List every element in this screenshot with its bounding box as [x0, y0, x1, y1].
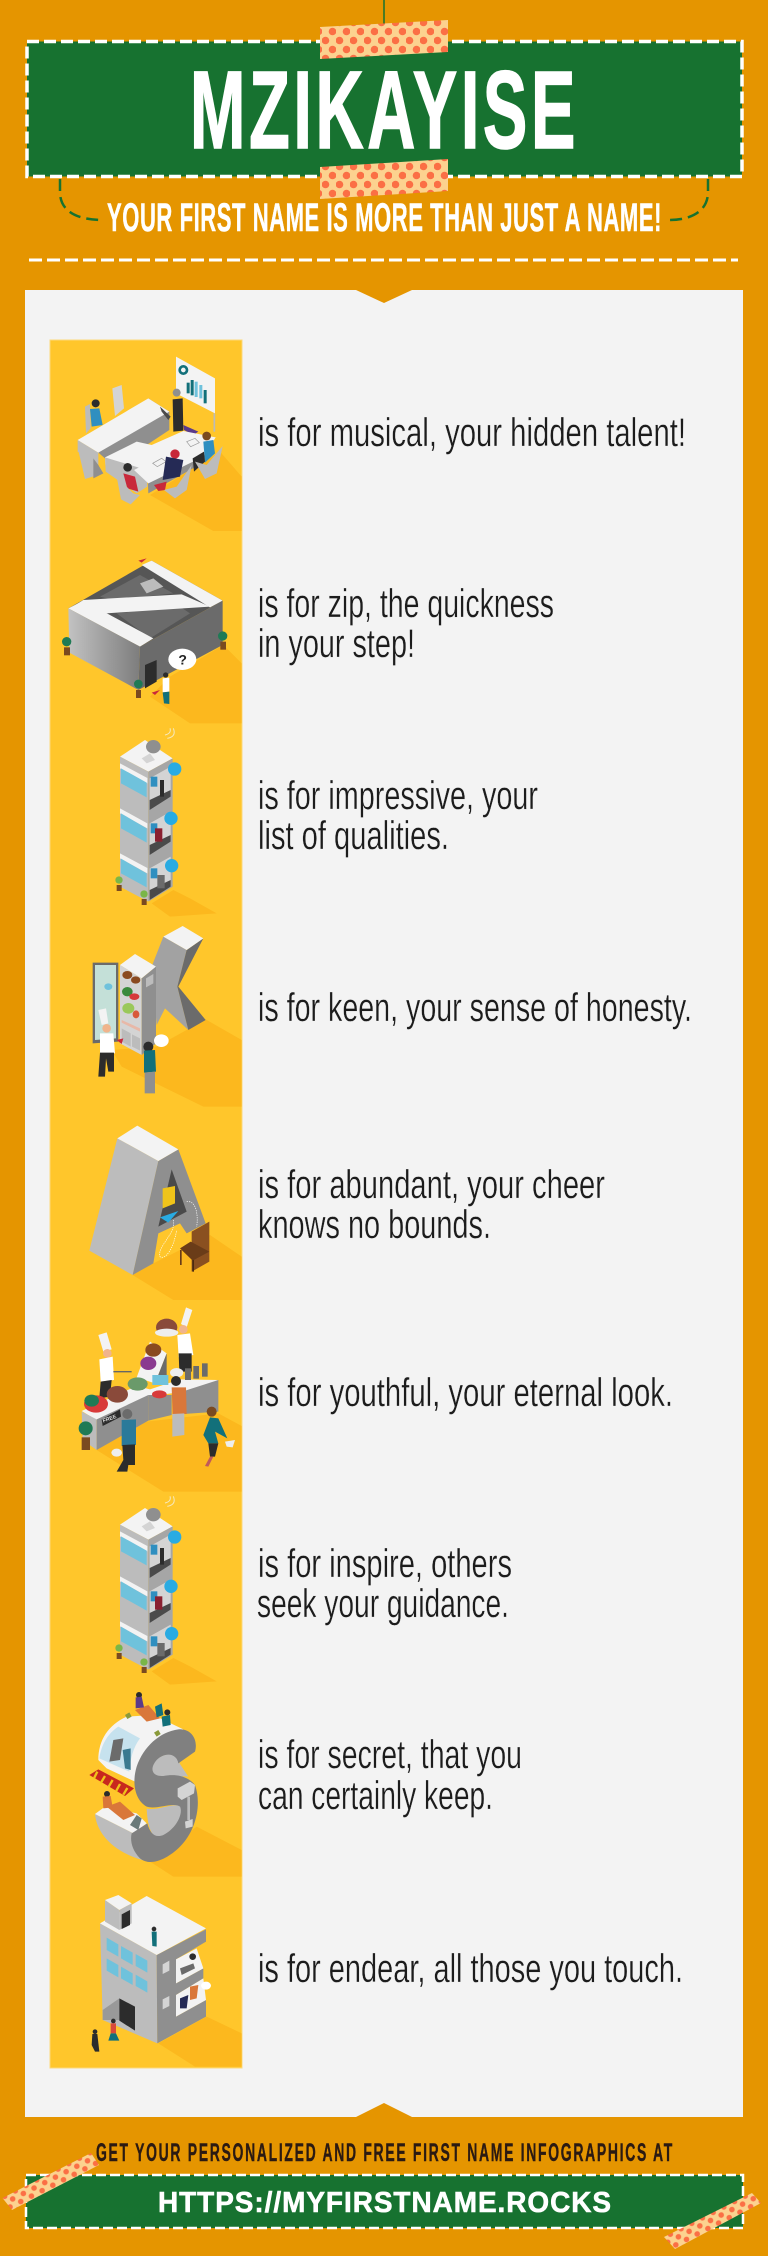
letter I text second: seek your guidance. — [257, 1582, 509, 1626]
title banner — [27, 42, 742, 176]
left dashed connector — [60, 179, 103, 220]
letter I text — [258, 774, 538, 858]
illustration: letter A — [89, 1126, 242, 1300]
letter Z text: is for zip, the quickness — [258, 582, 554, 626]
illustration: letter Y buffet — [79, 1307, 242, 1492]
letter I text: is for impressive, your — [258, 774, 538, 818]
letter A text: is for abundant, your cheer — [258, 1163, 605, 1207]
letter Z text — [258, 582, 554, 666]
illustration: letter M meeting table — [78, 357, 242, 531]
letter I text second: is for inspire, others — [258, 1542, 512, 1586]
footer banner — [26, 2175, 743, 2228]
letter S text — [258, 1733, 522, 1818]
left footer tape — [2, 2153, 99, 2210]
letter A text: knows no bounds. — [258, 1203, 491, 1247]
illustration: letter Z maze: ? — [178, 651, 187, 667]
bottom washi tape — [320, 159, 448, 199]
right dashed connector — [669, 179, 708, 220]
main content panel — [25, 290, 743, 2117]
top washi tape — [320, 20, 448, 59]
illustration column — [50, 340, 242, 2068]
illustration: letter Y buffet: FREE — [102, 1414, 118, 1425]
letter S text: is for secret, that you — [258, 1733, 522, 1777]
illustration: letter E building — [92, 1895, 242, 2067]
hanging thread — [383, 0, 385, 24]
illustration: letter Z maze — [62, 558, 242, 723]
letter I text: list of qualities. — [258, 814, 449, 858]
illustration: letter I tower — [115, 728, 217, 917]
footer url: HTTPS://MYFIRSTNAME.ROCKS — [158, 2187, 612, 2219]
letter A text — [258, 1163, 605, 1247]
top panel notch — [356, 290, 412, 303]
illustration: letter S — [89, 1692, 242, 1877]
illustration: letter K fridge — [93, 926, 242, 1107]
bottom panel notch — [356, 2103, 412, 2117]
letter I text second — [257, 1542, 512, 1626]
letter S text: can certainly keep. — [258, 1774, 493, 1818]
right footer tape — [664, 2193, 761, 2249]
illustration: letter I tower repeated — [115, 1496, 217, 1685]
letter Z text: in your step! — [258, 622, 415, 666]
